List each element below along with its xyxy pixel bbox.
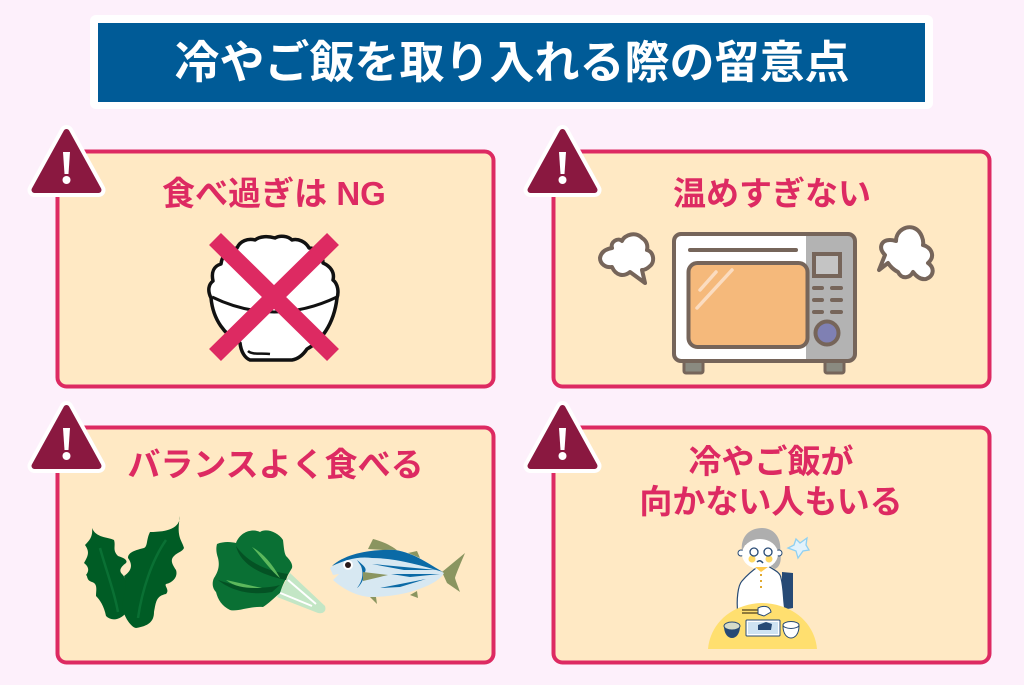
- panel: not suitable for some people: [530, 408, 990, 662]
- heading: do not overheat: 温めすぎない: [673, 175, 871, 212]
- icon: warning triangle: [34, 408, 98, 466]
- icon: steam right: [879, 227, 933, 279]
- icon: microwave: [674, 234, 855, 373]
- heading: not suitable for some people: 冷やご飯が: [688, 443, 854, 480]
- icon: warning triangle: [530, 132, 594, 190]
- icon: fish: [330, 539, 465, 604]
- heading: not suitable for some people: 向かない人もいる: [639, 483, 903, 520]
- icon: warning triangle: [530, 408, 594, 466]
- heading: balanced diet: バランスよく食べる: [127, 446, 424, 483]
- title: 冷やご飯を取り入れる際の留意点: [174, 37, 850, 88]
- icon: leafy vegetable: [213, 530, 325, 613]
- icon: warning triangle: [34, 132, 98, 190]
- panel: do not overheat: [530, 132, 990, 386]
- heading: eating too much: 食べ過ぎは NG: [162, 175, 386, 212]
- panel: balanced diet: [34, 408, 494, 662]
- panel: eating too much: [34, 132, 494, 386]
- icon: steam left: [600, 234, 653, 283]
- title banner: [90, 15, 933, 109]
- icon: rice bowl crossed out: [209, 236, 338, 360]
- icon: elderly person at table: [708, 528, 817, 649]
- icon: seaweed greens: [84, 516, 184, 628]
